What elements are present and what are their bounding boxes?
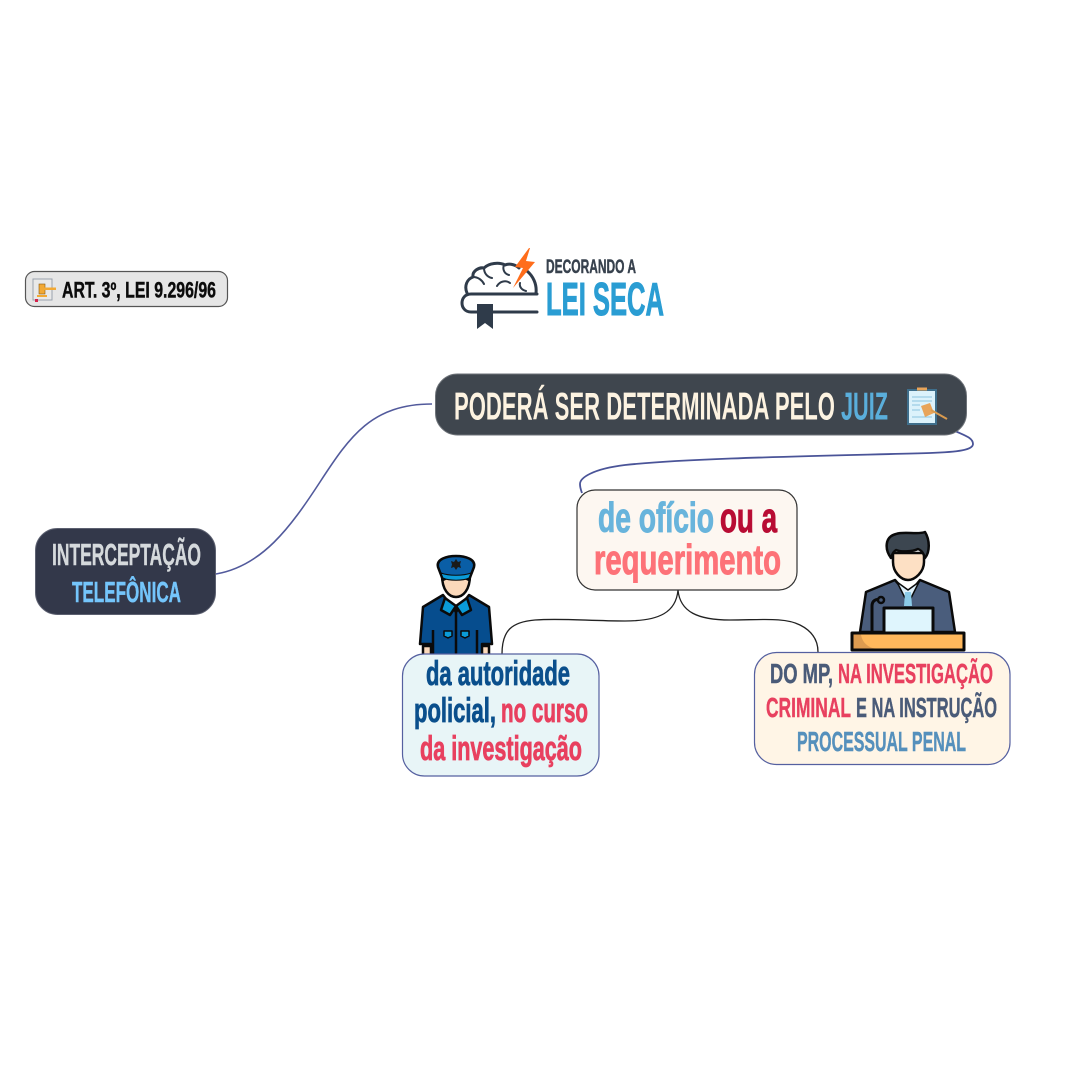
connector: topic to judge xyxy=(216,404,432,574)
icon: police officer xyxy=(420,556,492,656)
icon: brain and book xyxy=(462,263,537,312)
connector: de ofício to police xyxy=(502,590,678,654)
text: requerimento: requerimento xyxy=(594,536,781,583)
text: da autoridade: da autoridade xyxy=(426,655,570,693)
text: interceptação: INTERCEPTAÇÃO xyxy=(52,537,201,572)
text: ou a: ou a xyxy=(720,494,777,541)
panel: topic xyxy=(36,528,216,614)
text: juiz: JUIZ xyxy=(841,386,888,428)
panel: judge heading xyxy=(436,374,966,435)
panel: police authority xyxy=(402,654,599,776)
text: no curso: no curso xyxy=(501,692,588,730)
panel: public prosecutor xyxy=(754,652,1010,764)
text: Lei Seca: LEI SECA xyxy=(546,273,664,325)
text: article: ART. 3º, LEI 9.296/96 xyxy=(62,278,216,302)
connector: judge to de ofício xyxy=(580,431,973,493)
logo: Decorando a Lei Seca xyxy=(462,248,664,329)
text: criminal: CRIMINAL xyxy=(766,692,851,723)
panel: de ofício xyxy=(577,490,797,590)
text: Decorando a: DECORANDO A xyxy=(546,257,636,278)
text: do MP: DO MP, xyxy=(770,658,833,689)
text: policial: policial, xyxy=(414,692,496,730)
text: de ofício: de ofício xyxy=(598,494,714,541)
text: da investigação: da investigação xyxy=(420,730,582,768)
icon: prosecutor at lectern xyxy=(852,532,964,650)
icon: lightning bolt xyxy=(513,248,535,288)
connector: de ofício to prosecutor xyxy=(678,590,818,652)
icon: clipboard with gavel xyxy=(908,388,947,424)
icon: gavel document xyxy=(33,279,56,302)
text: telefônica: TELEFÔNICA xyxy=(72,576,181,609)
icon: badge star xyxy=(451,559,461,570)
icon: bookmark xyxy=(477,304,493,329)
label: article reference xyxy=(26,272,228,306)
